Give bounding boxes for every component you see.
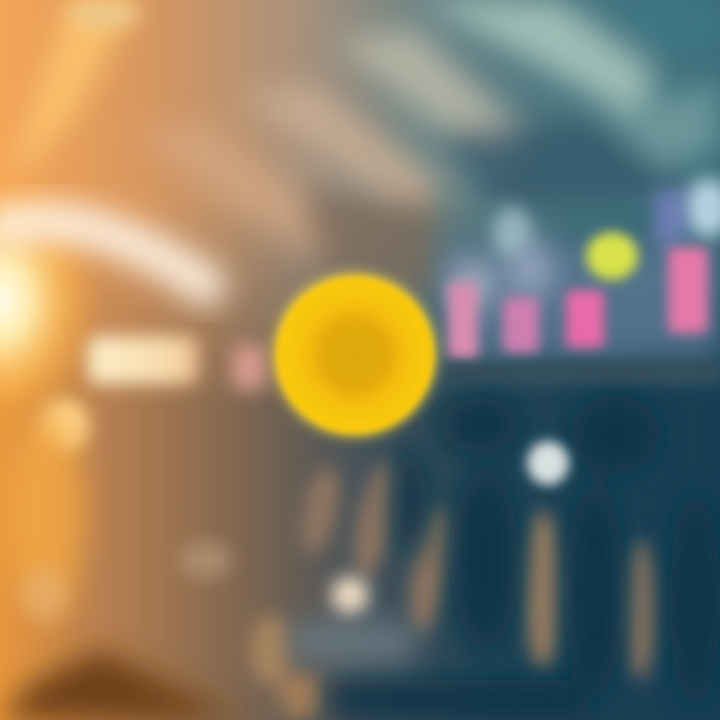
screens row <box>232 178 720 390</box>
golden coin <box>276 276 434 434</box>
cream panel <box>88 336 198 384</box>
lower flare spot <box>41 399 89 451</box>
screen 1 <box>448 282 478 360</box>
ceiling streaks <box>130 0 720 300</box>
white arc <box>2 222 205 285</box>
dark shelf band <box>440 362 720 384</box>
screen 2 <box>503 297 539 353</box>
background: lower cabin floor <box>0 227 720 720</box>
coin halo <box>271 271 439 439</box>
screen 3 <box>566 290 604 348</box>
bright spot at top <box>68 0 140 28</box>
orange glow <box>7 410 83 610</box>
pink left of coin <box>232 345 266 390</box>
white headrest <box>527 441 569 485</box>
screen backdrop <box>445 245 720 360</box>
dark seat backs <box>330 395 720 720</box>
screen 4 <box>668 247 708 333</box>
dark floor corner <box>0 650 240 720</box>
tan seat edges <box>250 458 656 719</box>
seats <box>250 395 720 720</box>
sunlight flare <box>0 0 231 621</box>
light ray <box>5 0 135 190</box>
main flare <box>0 170 100 430</box>
pale spot <box>331 576 369 614</box>
pale highlights <box>492 206 532 258</box>
yellow-green blob <box>586 232 638 280</box>
warm spots <box>21 569 69 621</box>
grey armrest <box>290 622 415 662</box>
